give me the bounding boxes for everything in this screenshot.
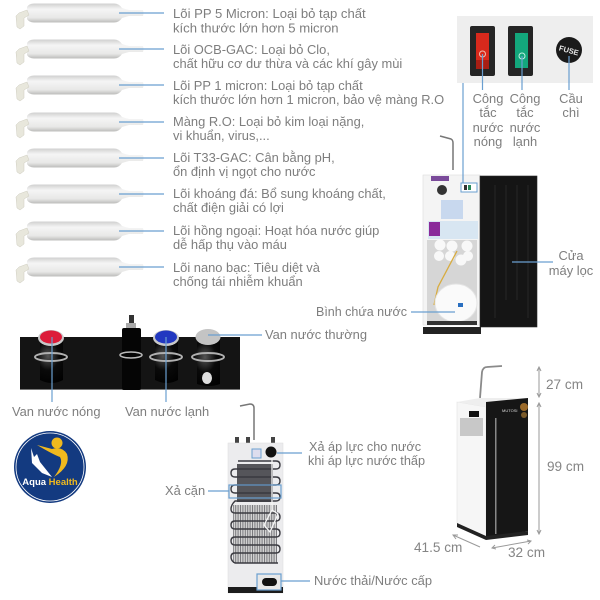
callout line: door [512, 261, 553, 263]
label: cold water switch: lạnh [513, 134, 537, 149]
filter cartridge 4 [16, 112, 164, 138]
machine with dimensions [457, 366, 528, 540]
filter label 4: vi khuẩn, virus,... [173, 128, 270, 143]
label: fuse: Cầu [559, 91, 583, 106]
filter label 6: chất điện giải có lợi [173, 200, 284, 215]
machine back view [228, 404, 283, 593]
callout line: tank [411, 311, 455, 313]
filter label 1: Lõi PP 5 Micron: Loại bỏ tạp chất [173, 6, 366, 21]
filter label 8: Lõi nano bạc: Tiêu diệt và [173, 260, 320, 275]
icon: central tap [120, 315, 142, 390]
filter label 3: kích thước lớn hơn 1 micron, bảo vệ màng R.O [173, 92, 444, 107]
dimension: 32 cm: 32 cm [508, 545, 545, 560]
filter label 8: chống tái nhiễm khuẩn [173, 274, 303, 289]
filter cartridge 6 [16, 184, 164, 210]
filter label 4: Màng R.O: Loại bỏ kim loại nặng, [173, 114, 364, 129]
label: normal valve: Van nước thường [265, 327, 367, 342]
label: cold water switch: Công [510, 91, 540, 106]
panel: switches and fuse [457, 16, 593, 83]
icon: hot valve [34, 330, 69, 383]
filter cartridge 3 [16, 76, 164, 101]
label: hot valve: Van nước nóng [12, 404, 101, 419]
logo: Aqua Health [14, 431, 86, 503]
filter label 5: Lõi T33-GAC: Cân bằng pH, [173, 150, 335, 165]
filter label 2: Lõi OCB-GAC: Loại bỏ Clo, [173, 42, 330, 57]
dimension: 99 cm: 99 cm [547, 459, 584, 474]
callout line: wastewater [281, 580, 310, 582]
machine with dimensions: MUTOSI [502, 408, 517, 413]
dimension arrows [453, 367, 541, 549]
label: door: Cửa [558, 248, 584, 263]
callout lines: valves [52, 335, 262, 402]
icon: fuse: FUSE [558, 44, 580, 57]
label: cold water switch: tắc [516, 105, 534, 120]
filter cartridge 5 [16, 148, 164, 174]
label: fuse: chì [562, 105, 580, 120]
label: cold valve: Van nước lạnh [125, 404, 209, 419]
label: door: máy lọc [549, 263, 594, 278]
label: sediment drain: Xả cặn [165, 483, 205, 498]
icon: cold valve [149, 330, 184, 383]
filter cartridge 2 [16, 40, 164, 65]
door of the machine [480, 176, 537, 327]
label: hot water switch: nóng [474, 134, 502, 149]
label: hot water switch: nước [473, 120, 504, 135]
icon: white hand [31, 448, 52, 477]
callout line: pressure release [277, 452, 302, 454]
filter label 1: kích thước lớn hơn 5 micron [173, 20, 339, 36]
icon: red switch [470, 26, 495, 76]
icon: yellow figure heart [37, 438, 68, 477]
icon: condenser coil [231, 461, 280, 563]
logo text: Aqua Health [22, 477, 78, 488]
icon: normal valve [191, 329, 226, 386]
dimension: 41.5 cm: 41.5 cm [414, 540, 462, 555]
label: hot water switch: Công [473, 91, 503, 106]
machine open front view [423, 136, 481, 334]
filter label 3: Lõi PP 1 micron: Loại bỏ tạp chất [173, 78, 363, 93]
callout lines for switches [482, 54, 569, 90]
filter label 7: dễ hấp thụ vào máu [173, 237, 287, 252]
label: wastewater: Nước thải/Nước cấp [314, 573, 432, 588]
label: pressure release: Xả áp lực cho nước [309, 440, 421, 454]
label: hot water switch: tắc [479, 105, 497, 120]
icon: green switch [508, 26, 533, 76]
label: water tank: Bình chứa nước [316, 305, 407, 319]
filter cartridge 1 [16, 4, 164, 29]
dimension: 27 cm: 27 cm [546, 377, 583, 392]
filter cartridge 7 [16, 222, 164, 247]
filter label 7: Lõi hồng ngoại: Hoạt hóa nước giúp [173, 223, 379, 238]
panel: valve strip [20, 315, 240, 390]
filter label 2: chất hữu cơ dư thừa và các khí gây mùi [173, 56, 402, 71]
callout line: panel to machine [462, 83, 464, 183]
filter cartridge 8 [16, 258, 164, 283]
label: cold water switch: nước [510, 120, 541, 135]
filter label 6: Lõi khoáng đá: Bổ sung khoáng chất, [173, 186, 386, 201]
label: pressure release: khi áp lực nước thấp [308, 454, 425, 468]
filter label 5: ổn định vị ngọt cho nước [173, 164, 316, 179]
callout line: sediment [208, 490, 229, 492]
